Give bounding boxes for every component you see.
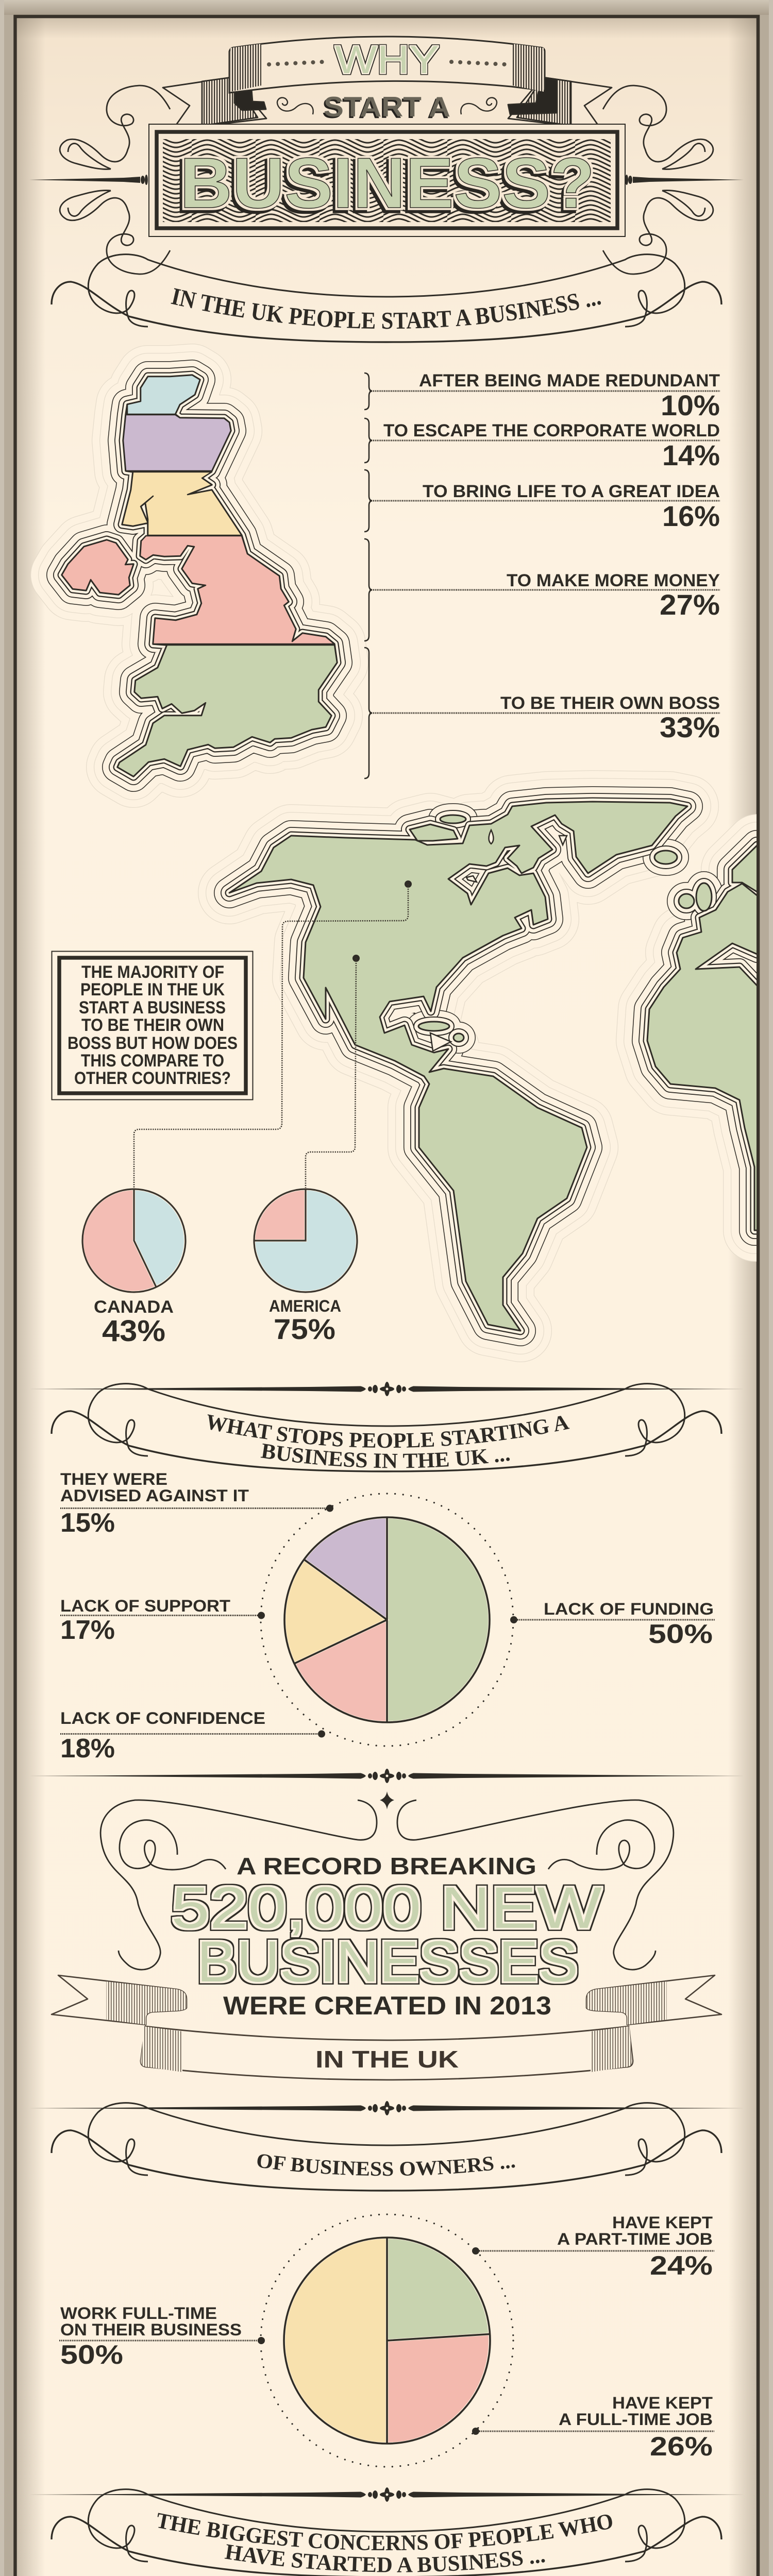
uk contour rings — [62, 375, 337, 776]
reason: corporate world — [369, 421, 720, 471]
label: lack of support: 17% — [60, 1615, 115, 1645]
label: advised against: THEY WERE — [60, 1470, 167, 1488]
label: america — [269, 1297, 341, 1345]
star ornament — [380, 1791, 394, 1809]
pie: what stops people — [261, 1494, 513, 1746]
label: full-time job: A FULL-TIME JOB — [559, 2410, 713, 2429]
a record breaking: A RECORD BREAKING — [237, 1853, 536, 1879]
label: lack of support — [60, 1597, 265, 1645]
record breaking panel — [52, 1791, 721, 2080]
reason brackets — [364, 373, 372, 778]
callout: majority of people: THIS COMPARE TO — [81, 1051, 224, 1071]
label: canada: CANADA — [94, 1297, 174, 1317]
reason: great idea: 16% — [662, 500, 720, 532]
reason: more money: TO MAKE MORE MONEY — [507, 571, 720, 590]
label: canada: 43% — [102, 1314, 165, 1348]
scotland north — [127, 375, 200, 414]
decorative dots — [269, 62, 506, 64]
continents — [229, 802, 768, 1331]
world contour rings — [229, 802, 768, 1331]
520,000 new: 520,000 NEW — [171, 1875, 602, 1941]
label: part-time job: HAVE KEPT — [612, 2213, 713, 2232]
header ribbon: what stops people: WHAT STOPS PEOPLE STARTING A — [207, 1414, 570, 1448]
label: lack of funding: 50% — [648, 1619, 713, 1649]
header ribbon: what stops people: BUSINESS IN THE UK ... — [261, 1444, 510, 1468]
callout: majority of people: START A BUSINESS — [79, 998, 226, 1018]
connector: america — [306, 955, 360, 1189]
header ribbon: in the uk: IN THE UK PEOPLE START A BUSINESS ... — [171, 288, 601, 329]
callout: majority of people: OTHER COUNTRIES? — [74, 1069, 231, 1088]
midlands and ireland — [62, 536, 334, 644]
islands — [418, 815, 712, 1042]
side spikes — [29, 175, 744, 185]
label: work full-time — [59, 2304, 265, 2370]
header ribbon: of business owners — [51, 2102, 722, 2192]
ribbon hatching — [230, 44, 544, 92]
businesses: BUSINESSES — [197, 1929, 578, 1994]
label: canada — [94, 1297, 174, 1348]
header ribbon: of business owners: OF BUSINESS OWNERS ... — [258, 2155, 515, 2176]
flourish frame — [100, 1800, 674, 1970]
reason: corporate world: 14% — [662, 439, 720, 471]
label: lack of confidence — [60, 1709, 325, 1764]
reason: great idea — [369, 482, 720, 532]
word: why: WHY — [335, 38, 439, 82]
ribbon tails — [163, 77, 612, 130]
label: america: 75% — [274, 1313, 335, 1345]
connector: canada — [134, 880, 412, 1189]
uk regions — [62, 375, 337, 776]
reason: corporate world: TO ESCAPE THE CORPORATE WORLD — [383, 421, 720, 440]
pie: america — [254, 1189, 357, 1292]
in the uk: IN THE UK — [315, 2046, 459, 2073]
pie: canada — [82, 1189, 186, 1292]
reason: great idea: TO BRING LIFE TO A GREAT IDEA — [423, 482, 720, 501]
uk map with reasons — [62, 371, 720, 778]
reason: redundant: AFTER BEING MADE REDUNDANT — [419, 371, 720, 391]
word: business: BUSINESS? — [180, 143, 595, 223]
reason: redundant — [369, 371, 720, 421]
callout: majority of people: THE MAJORITY OF — [81, 962, 224, 982]
reason: own boss: TO BE THEIR OWN BOSS — [500, 693, 720, 713]
label: advised against: 15% — [60, 1508, 115, 1538]
reason: more money — [369, 571, 720, 621]
scotland south — [123, 415, 231, 471]
reason: redundant: 10% — [661, 389, 720, 421]
reason: more money: 27% — [660, 588, 720, 621]
callout: majority of people: TO BE THEIR OWN — [81, 1015, 224, 1035]
header ribbon: biggest concerns — [51, 2488, 722, 2576]
label: lack of confidence: 18% — [60, 1734, 115, 1764]
word: start a: START A — [324, 91, 450, 123]
ribbon under headline — [52, 1975, 721, 2080]
inland detail — [430, 830, 567, 1051]
divider — [29, 1382, 744, 1396]
label: america: AMERICA — [269, 1297, 341, 1315]
callout: majority of people: PEOPLE IN THE UK — [80, 980, 225, 999]
world map — [229, 802, 768, 1331]
callout: majority of people: BOSS BUT HOW DOES — [68, 1033, 238, 1053]
label: full-time job — [472, 2394, 714, 2462]
label: advised against — [60, 1470, 333, 1538]
label: lack of support: LACK OF SUPPORT — [60, 1597, 230, 1615]
label: work full-time: ON THEIR BUSINESS — [60, 2320, 242, 2339]
header ribbon: what stops people — [51, 1383, 722, 1472]
label: lack of confidence: LACK OF CONFIDENCE — [60, 1709, 265, 1727]
divider — [29, 1769, 744, 1783]
south — [117, 645, 337, 776]
label: advised against: ADVISED AGAINST IT — [60, 1486, 249, 1505]
label: part-time job — [472, 2213, 714, 2281]
label: full-time job: 26% — [650, 2432, 713, 2462]
main title box — [149, 124, 625, 236]
label: full-time job: HAVE KEPT — [612, 2394, 713, 2412]
reason: own boss: 33% — [660, 711, 720, 743]
label: part-time job: A PART-TIME JOB — [557, 2230, 713, 2248]
label: part-time job: 24% — [650, 2251, 713, 2281]
reason: own boss — [369, 693, 720, 743]
callout: majority of people — [52, 951, 253, 1099]
label: lack of funding: LACK OF FUNDING — [544, 1600, 714, 1618]
divider — [29, 2101, 744, 2115]
north — [122, 472, 242, 535]
label: work full-time: WORK FULL-TIME — [60, 2304, 217, 2323]
label: work full-time: 50% — [60, 2340, 123, 2370]
curls beside start a — [277, 98, 497, 114]
divider — [29, 2487, 744, 2502]
top ribbon — [229, 37, 545, 93]
side scroll flourishes — [60, 86, 713, 274]
header ribbon: in the uk — [51, 253, 722, 343]
label: lack of funding — [510, 1600, 715, 1649]
were created in 2013: WERE CREATED IN 2013 — [223, 1991, 551, 2020]
pie: business owners — [261, 2214, 513, 2467]
header ribbon: biggest concerns: THE BIGGEST CONCERNS OF PEOPLE WHO — [158, 2513, 612, 2550]
title block — [29, 37, 744, 274]
